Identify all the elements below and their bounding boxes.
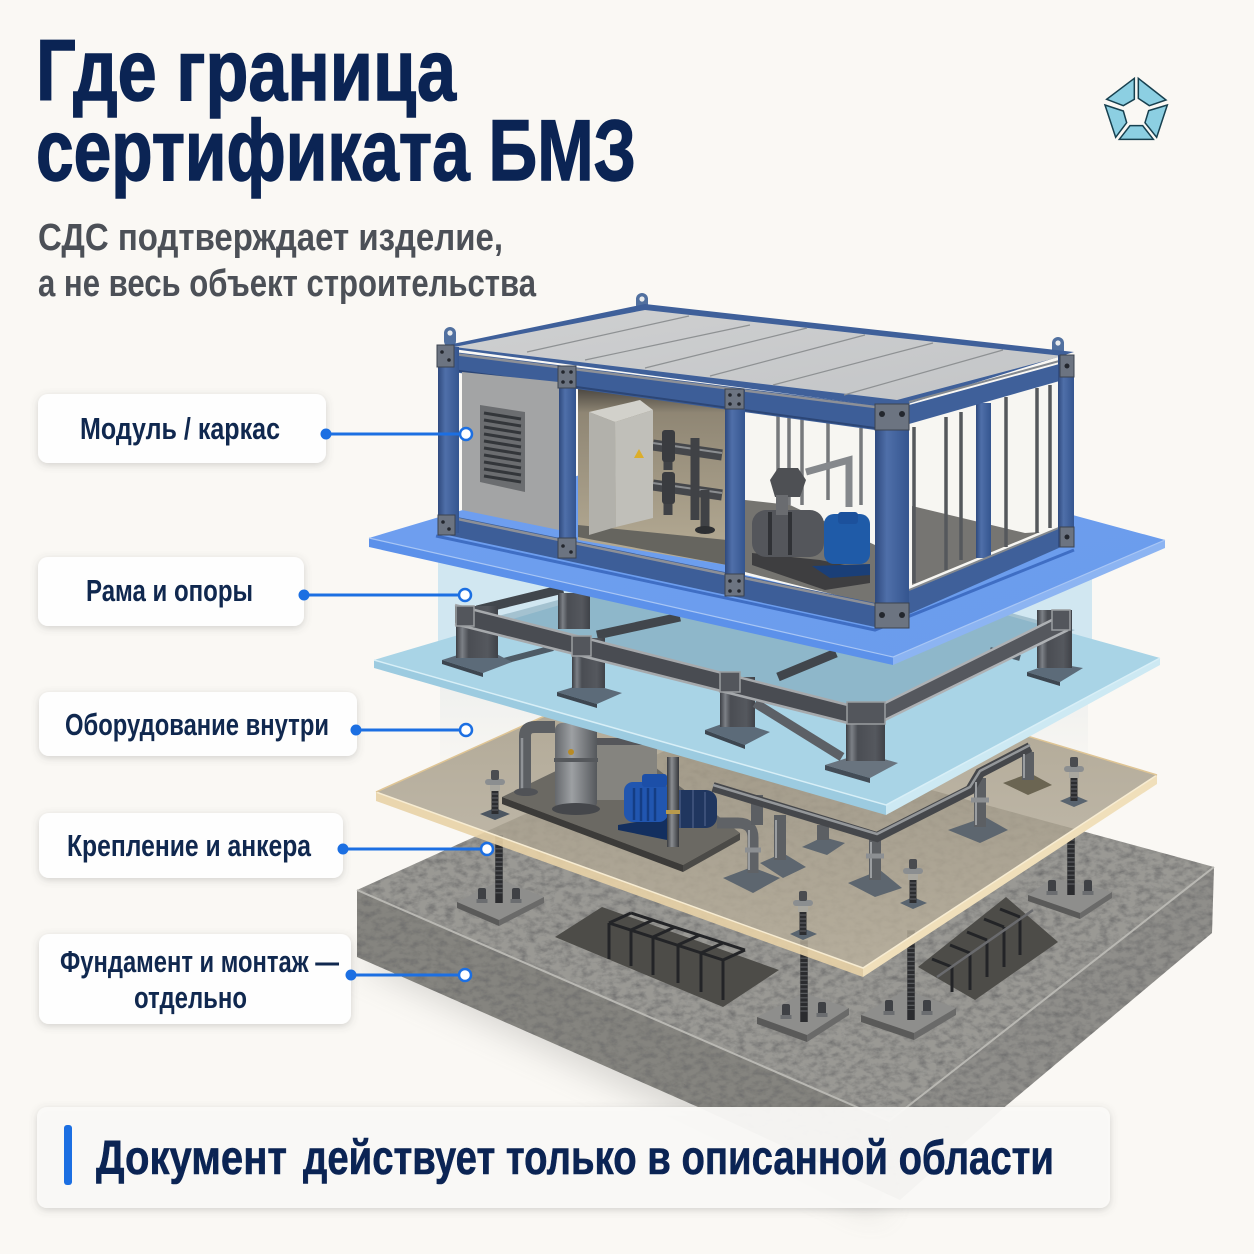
interior opening: [578, 388, 727, 565]
leader: anchors: [338, 843, 493, 855]
label: foundation: отдельно: [134, 980, 247, 1015]
translucent boundary column lower: [440, 660, 1088, 770]
label: foundation: Фундамент и монтаж —: [60, 944, 339, 979]
diagonal brace: [755, 703, 842, 757]
plate: anchors layer (beige): [376, 641, 1157, 977]
label: equipment: [39, 692, 357, 756]
joint plates: [437, 345, 1074, 628]
title: сертификата БМЗ: [36, 103, 636, 199]
title: Где граница: [36, 23, 457, 119]
side beams: [909, 360, 1063, 614]
title: [36, 23, 636, 199]
translucent boundary column upper: [438, 550, 1092, 660]
roof: [438, 304, 1074, 408]
rebar pit left: [555, 907, 779, 1007]
block-module: [437, 293, 1074, 628]
joint bolts: [440, 350, 1070, 618]
support base plates: [442, 647, 1083, 783]
bottom banner: [37, 1107, 1110, 1208]
support posts: [456, 606, 1072, 761]
bottom banner: Документ: [96, 1132, 287, 1185]
label: frame: Рама и опоры: [86, 573, 253, 608]
leader: foundation: [346, 969, 471, 981]
label: equipment: Оборудование внутри: [65, 707, 329, 742]
rear cross members: [477, 589, 1020, 677]
pipe supports: [723, 773, 1052, 897]
window opening: [745, 405, 875, 605]
subtitle: СДС подтверждает изделие,: [38, 217, 503, 259]
anchor plates and rods: [457, 835, 1112, 1042]
left panel: [462, 372, 559, 530]
lifting lugs: [444, 293, 1064, 405]
leader: equipment: [350, 724, 472, 736]
frame beams: [455, 605, 1070, 724]
plate: equipment layer (light blue): [374, 546, 1160, 815]
ventilation grille: [480, 405, 525, 492]
leader: frame: [298, 589, 471, 601]
electrical cabinet: [589, 400, 653, 535]
blue motor and pump: [618, 757, 717, 847]
equipment box: [597, 738, 657, 800]
floor shadow: [350, 920, 880, 1215]
long beams: [438, 350, 875, 627]
leader: module: [320, 428, 472, 440]
label: foundation: [39, 934, 351, 1024]
equipment skid: [502, 740, 740, 872]
subtitle: а не весь объект строительства: [38, 263, 537, 305]
label: module: [38, 394, 326, 463]
label: anchors: Крепление и анкера: [67, 828, 312, 863]
concrete foundation: [357, 730, 1214, 1200]
vertical tank: [552, 723, 600, 815]
label: frame: [38, 557, 304, 626]
left pipes: [514, 727, 555, 796]
label: anchors: [39, 813, 343, 878]
rebar pit right: [918, 897, 1058, 1000]
bolts above anchor plate: [480, 757, 1088, 940]
equipment inside: [502, 723, 1052, 897]
plate: frame layer (blue): [369, 426, 1165, 665]
label: module: Модуль / каркас: [80, 411, 280, 446]
posts: [438, 347, 1074, 627]
bottom banner: действует только в описанной области: [303, 1132, 1054, 1185]
icon: pentagon logo: [1105, 78, 1167, 139]
side opening: [909, 378, 1060, 590]
pump in window: [752, 460, 870, 590]
subtitle: [38, 217, 537, 305]
steel frame and supports: [442, 589, 1083, 783]
frame corner nodes: [456, 606, 1070, 724]
pipework: [713, 745, 1030, 880]
